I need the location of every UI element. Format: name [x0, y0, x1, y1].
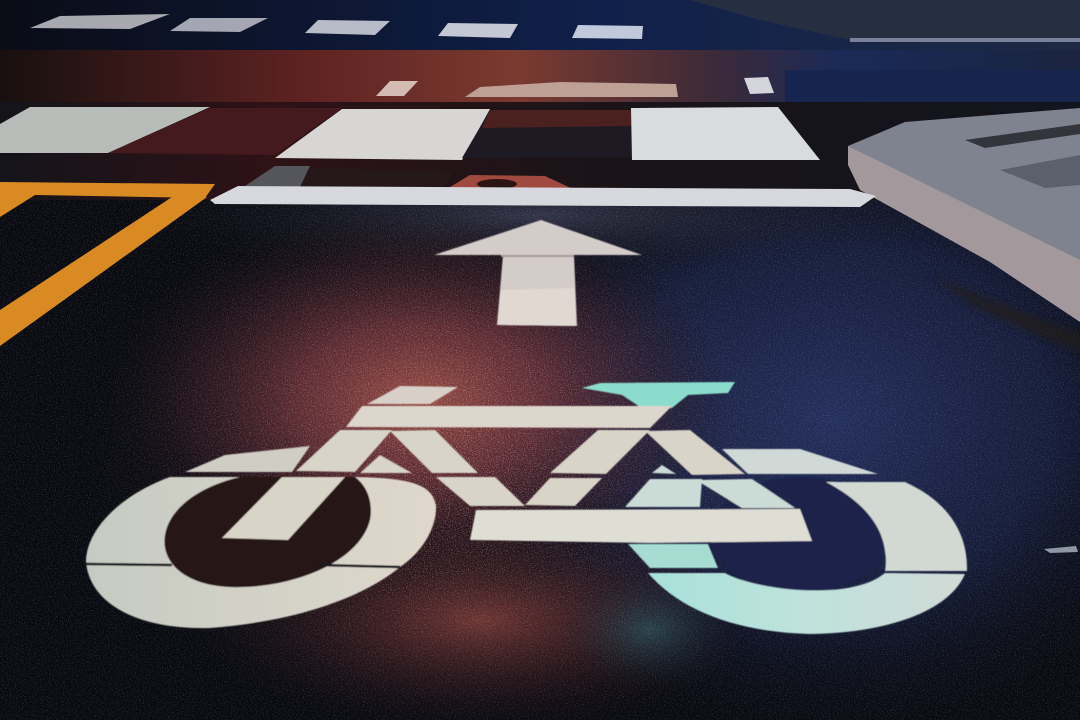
road lighting and reflections: [0, 200, 1080, 720]
top street band: [0, 0, 1080, 106]
orange lane lines: [0, 182, 215, 346]
crank bar: [470, 509, 812, 543]
crosswalk band: [0, 102, 1080, 200]
handlebar: [582, 382, 735, 408]
top tube: [346, 406, 672, 428]
frame pieces: [222, 430, 795, 568]
right wheel: [648, 477, 967, 634]
left wheel: [86, 477, 436, 628]
seat: [367, 386, 458, 404]
small paint fleck: [1044, 546, 1078, 553]
right fender: [722, 449, 878, 474]
arrow marking: [434, 220, 642, 326]
bicycle marking: [86, 382, 967, 634]
stop line: [210, 186, 876, 207]
left fender: [185, 446, 310, 472]
sidewalk curb: [848, 108, 1080, 352]
